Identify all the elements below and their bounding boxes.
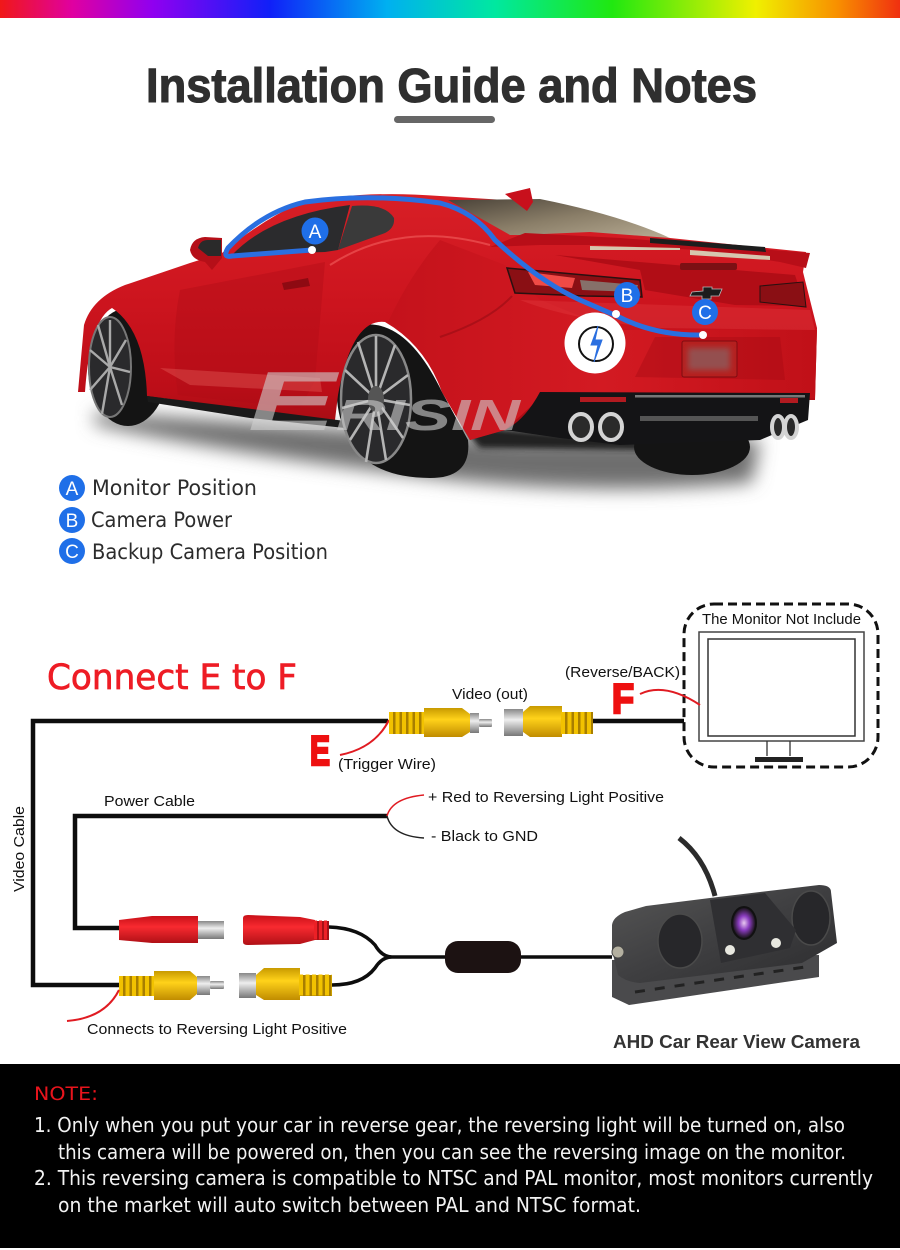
inline module	[445, 941, 521, 973]
badge A on car: A	[309, 222, 322, 243]
power split wires	[387, 795, 424, 838]
badge C on car: C	[698, 303, 712, 324]
connector: lower yellow socket	[239, 968, 332, 1000]
connector: red power socket	[243, 915, 329, 945]
monitor screen	[708, 639, 855, 736]
legend item B: B	[66, 511, 78, 532]
heading: connect E to F: Connect E to F	[47, 658, 297, 698]
right sensor	[792, 891, 830, 945]
dashed outline	[684, 604, 878, 767]
note line 2: this camera will be powered on, then you can see the reversing image on the monitor.	[58, 1140, 846, 1164]
mirror	[190, 237, 222, 270]
bracket slots	[635, 966, 812, 992]
reversing light label: Connects to Reversing Light Positive	[87, 1021, 347, 1038]
legend item A: A	[66, 479, 79, 500]
side glass	[232, 205, 394, 255]
legend item A: Monitor Position	[92, 476, 257, 500]
camera mount bracket	[612, 955, 819, 1005]
y-splitter cable	[329, 927, 612, 985]
trigger wire label: (Trigger Wire)	[338, 756, 436, 773]
badge B on car: B	[621, 286, 633, 307]
right tail light	[760, 282, 806, 307]
video cable to monitor	[590, 719, 684, 723]
tyres	[88, 308, 750, 478]
badge B on car	[612, 282, 640, 318]
infrared LEDs	[725, 938, 781, 955]
side skirt	[147, 396, 345, 428]
monitor caption: The Monitor Not Include	[702, 612, 861, 628]
rear spoiler	[490, 233, 810, 268]
rear window	[448, 199, 670, 238]
note line 1: 1. Only when you put your car in reverse gear, the reversing light will be turned on, also	[34, 1113, 845, 1137]
plate recess	[635, 337, 785, 380]
wiring diagram	[12, 664, 700, 1038]
legend item B: Camera Power	[91, 508, 232, 532]
power cable	[75, 816, 387, 928]
door handle	[282, 278, 310, 290]
badge C on car	[692, 299, 718, 339]
E pointer	[340, 720, 389, 755]
chevrolet bowtie	[690, 287, 722, 299]
rear side shoulder highlight	[330, 236, 490, 265]
monitor	[684, 604, 878, 767]
label E: E	[310, 727, 330, 774]
rainbow top bar	[0, 0, 900, 18]
front rim	[89, 317, 131, 417]
connector: red power plug	[119, 916, 224, 943]
side highlight	[160, 368, 322, 392]
video cable label: Video Cable	[12, 806, 28, 892]
left sensor	[658, 914, 702, 968]
connector: lower yellow plug	[119, 971, 224, 1000]
reversing light pointer	[67, 990, 119, 1021]
watermark: E RISIN	[248, 354, 522, 448]
camera caption: AHD Car Rear View Camera	[613, 1032, 861, 1052]
underbody	[460, 425, 640, 450]
lens	[732, 907, 756, 939]
car illustration	[78, 188, 817, 489]
F pointer	[640, 690, 700, 705]
note heading: NOTE:	[34, 1083, 98, 1105]
door shade	[174, 262, 325, 408]
badge A on car	[302, 218, 328, 254]
third brake light	[680, 263, 737, 270]
bumper light band	[520, 300, 815, 330]
icon: camera power	[564, 312, 626, 374]
ground shadow	[95, 412, 760, 489]
red positive label: + Red to Reversing Light Positive	[428, 789, 664, 806]
power cable label: Power Cable	[104, 794, 195, 810]
reverse back label: (Reverse/BACK)	[565, 664, 680, 681]
haunch crease	[440, 296, 512, 337]
legend item C: Backup Camera Position	[92, 540, 328, 564]
legend	[59, 475, 328, 564]
lens panel	[710, 893, 796, 963]
shark fin antenna	[505, 188, 533, 211]
video cable	[33, 721, 388, 985]
note panel	[0, 1064, 900, 1248]
monitor bezel	[699, 632, 864, 741]
note line 4: on the market will auto switch between PAL and NTSC format.	[58, 1193, 641, 1217]
exhaust tips	[570, 414, 797, 440]
label F: F	[612, 675, 634, 722]
trunk	[555, 255, 805, 306]
title: Installation Guide and Notes	[146, 60, 757, 113]
camera body	[612, 885, 837, 983]
monitor stand	[755, 741, 803, 762]
note background	[0, 1064, 900, 1248]
car body	[78, 194, 817, 440]
camera product	[612, 838, 837, 1005]
video out label: Video (out)	[452, 686, 528, 703]
rear quarter panel shading	[388, 240, 817, 440]
mount screw	[612, 946, 624, 958]
number plate	[682, 341, 737, 377]
left tail light	[507, 268, 642, 297]
black ground label: - Black to GND	[431, 828, 538, 845]
connector: yellow socket	[504, 706, 593, 737]
connector: yellow E plug	[389, 708, 492, 737]
diffuser strips	[580, 395, 805, 421]
legend item C: C	[65, 542, 79, 563]
lower bumper	[505, 392, 810, 445]
blue wire route	[226, 198, 703, 335]
rear rim	[341, 335, 411, 463]
camera cable	[679, 838, 715, 896]
